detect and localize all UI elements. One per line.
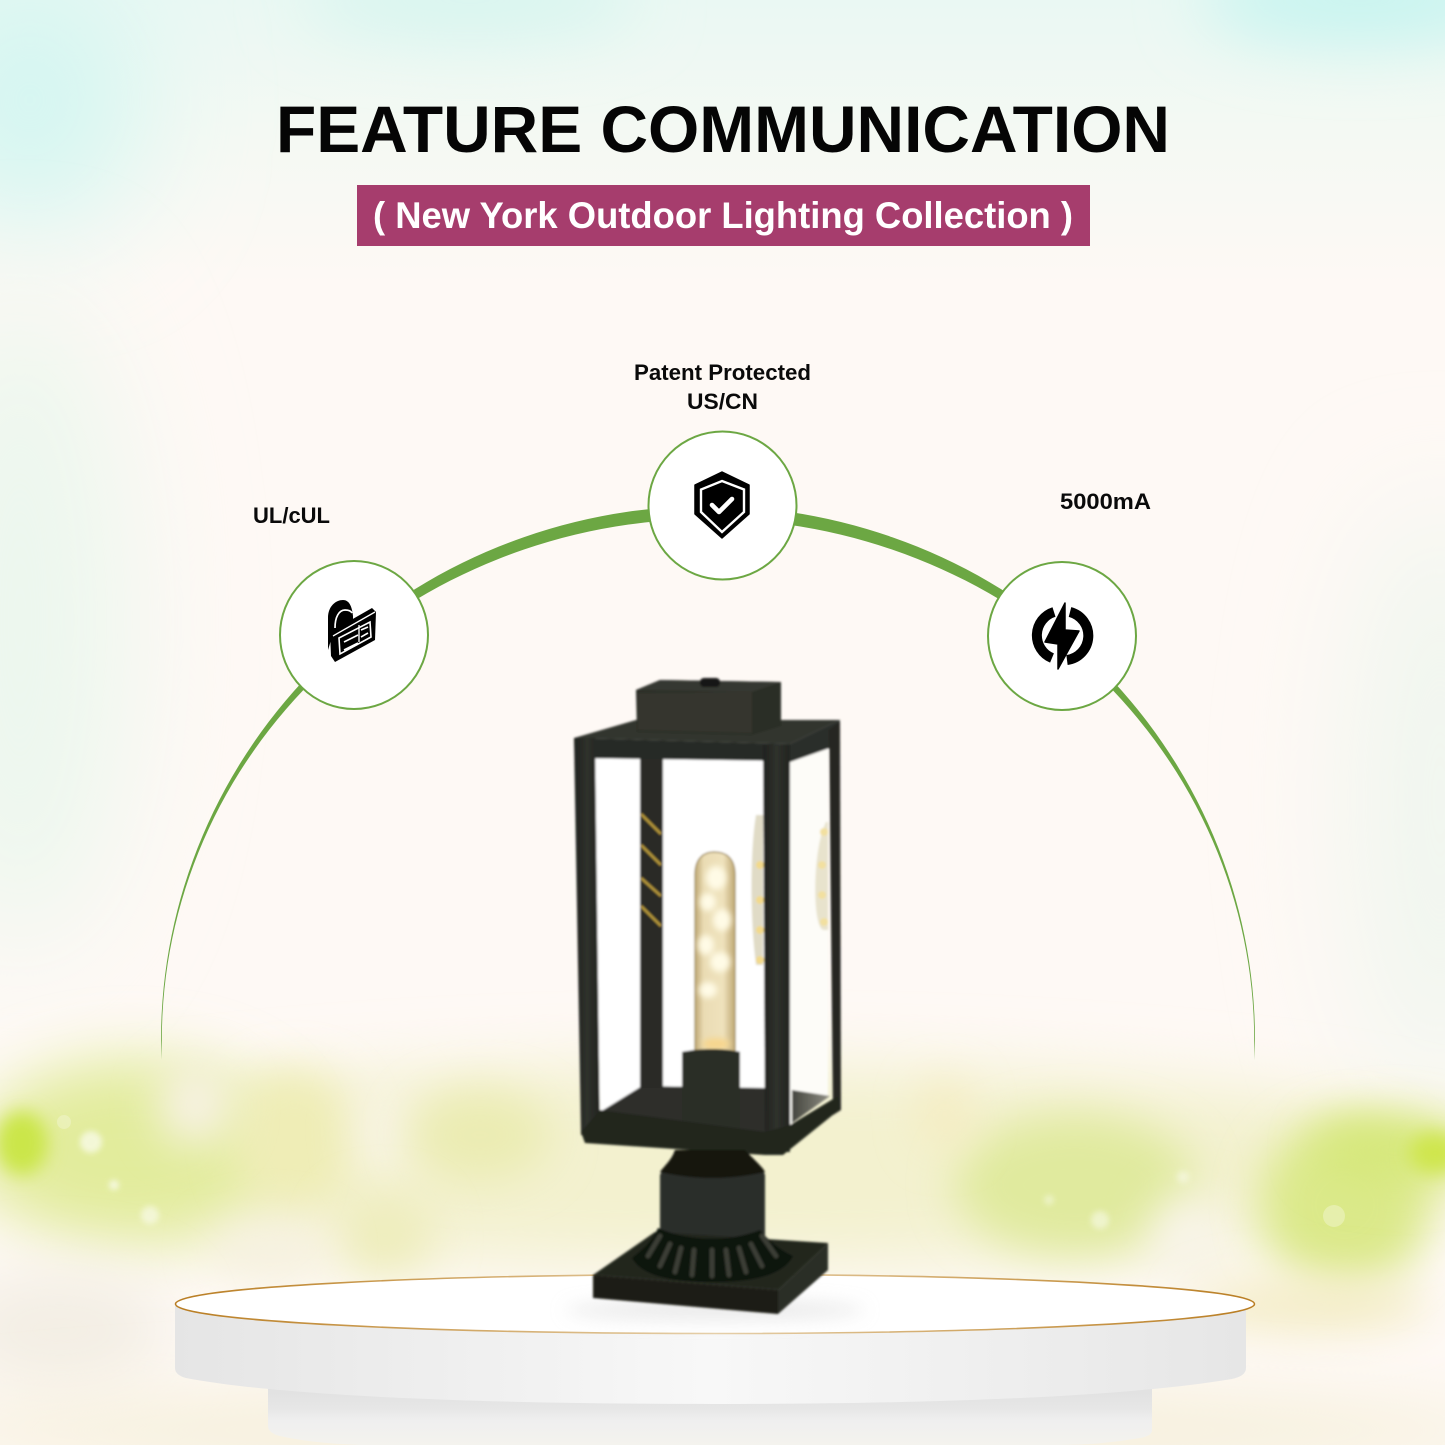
title: FEATURE COMMUNICATION [276,92,1170,166]
label: US/CN: US/CN [687,389,758,414]
subtitle banner [357,185,1090,246]
icon: certification plate [328,600,376,662]
rear post with filament reflection [640,756,663,1088]
solar cap [636,678,781,735]
feature: patent protected [634,360,811,580]
side reflections [752,815,828,965]
label: 5000mA: 5000mA [1060,489,1151,514]
base plate [593,1232,828,1314]
green arc connecting features [161,506,1255,1060]
feature: UL/cUL [253,503,428,709]
label: patent protected: Patent Protected [634,360,811,385]
circle badge [988,562,1136,710]
lamp shadow on podium [565,1300,865,1320]
podium upper tier [175,1306,1246,1404]
circle badge [280,561,428,709]
bokeh sparkles [57,1115,1345,1229]
label: UL/cUL: UL/cUL [253,503,330,528]
circle badge [648,432,796,580]
fluted flare [632,1228,793,1282]
icon: shield check [695,472,749,538]
glass panes [594,748,828,1132]
lantern frame [574,720,841,1155]
feature: 5000mA [988,489,1151,710]
lantern post lamp [574,678,841,1314]
podium lower tier [268,1385,1152,1445]
filament bulb [695,852,735,1055]
podium top surface [176,1274,1254,1334]
pedestal neck [660,1150,765,1240]
icon: power bolt [1037,603,1088,669]
podium [175,1274,1254,1445]
subtitle banner: ( New York Outdoor Lighting Collection ) [373,195,1073,236]
lantern floor [600,1086,830,1134]
socket [682,1049,740,1132]
